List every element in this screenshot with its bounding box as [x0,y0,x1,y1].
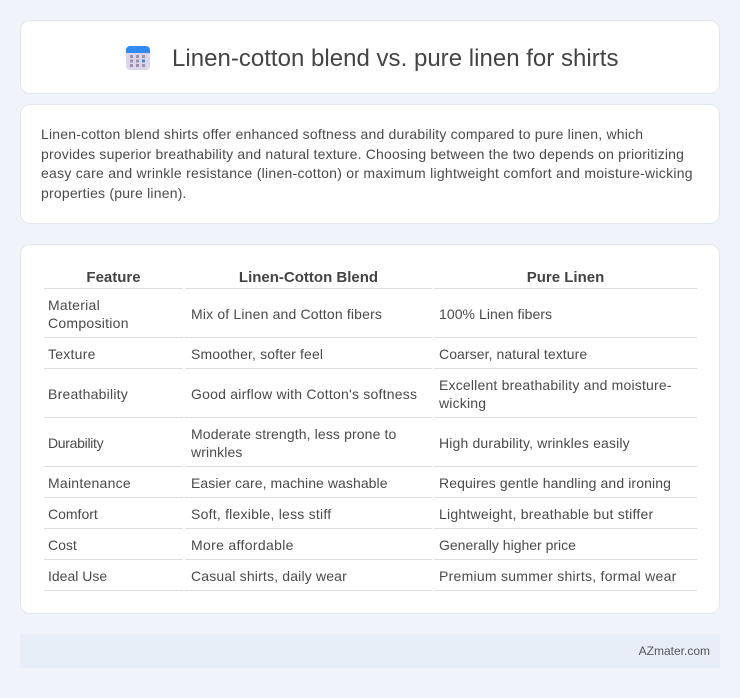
row: breathability: wicking [439,395,486,411]
row: durability: Moderate strength, less prone to [191,426,396,442]
row: texture: Smoother, softer feel [191,346,323,362]
row: texture [48,346,587,362]
row: material composition: Composition [48,315,129,331]
row: maintenance: Maintenance [48,475,131,491]
row: comfort: Soft, flexible, less stiff [191,506,331,522]
row: breathability [48,377,672,411]
row: material composition: Material [48,297,100,313]
row: ideal use: Ideal Use [48,568,107,584]
row: material composition [48,297,552,331]
icon: calendar [126,46,150,70]
row: cost: Cost [48,537,77,553]
intro paragraph [41,126,693,201]
row: material composition: 100% Linen fibers [439,306,552,322]
intro paragraph: properties (pure linen). [41,185,187,201]
intro paragraph: Linen-cotton blend shirts offer enhanced softness and durability compared to pure linen, which [41,126,643,142]
row: cost: More affordable [191,537,294,553]
title: Linen-cotton blend vs. pure linen for shirts [172,45,618,72]
header panel [20,20,720,94]
row: maintenance: Requires gentle handling and ironing [439,475,671,491]
row: maintenance [48,475,671,491]
footer bar [20,634,720,668]
row: durability: High durability, wrinkles easily [439,435,630,451]
row: ideal use: Premium summer shirts, formal wear [439,568,677,584]
row: cost: Generally higher price [439,537,576,553]
row: durability: wrinkles [191,444,243,460]
column headers: Pure Linen [527,269,604,286]
intro paragraph: easy care and wrinkle resistance (linen-cotton) or maximum lightweight comfort and moisture-wicking [41,165,693,181]
row: durability: Durability [48,435,103,451]
column headers: Linen-Cotton Blend [239,269,378,286]
comparison table panel [20,244,720,614]
row: breathability: Good airflow with Cotton's softness [191,386,417,402]
row: maintenance: Easier care, machine washable [191,475,388,491]
row: ideal use [48,568,677,584]
row: texture: Coarser, natural texture [439,346,587,362]
row: comfort [48,506,653,522]
footer source text: AZmater.com [639,644,710,658]
row: ideal use: Casual shirts, daily wear [191,568,347,584]
row: comfort: Lightweight, breathable but stiffer [439,506,653,522]
intro paragraph: provides superior breathability and natural texture. Choosing between the two depends on prioritizing [41,146,684,162]
row: material composition: Mix of Linen and Cotton fibers [191,306,382,322]
row: comfort: Comfort [48,506,98,522]
row: cost [48,537,576,553]
column headers [86,269,604,286]
row: durability [48,426,630,460]
row: texture: Texture [48,346,96,362]
column headers: Feature [86,269,141,286]
row: breathability: Breathability [48,386,128,402]
row: breathability: Excellent breathability and moisture- [439,377,672,393]
intro text panel [20,104,720,224]
